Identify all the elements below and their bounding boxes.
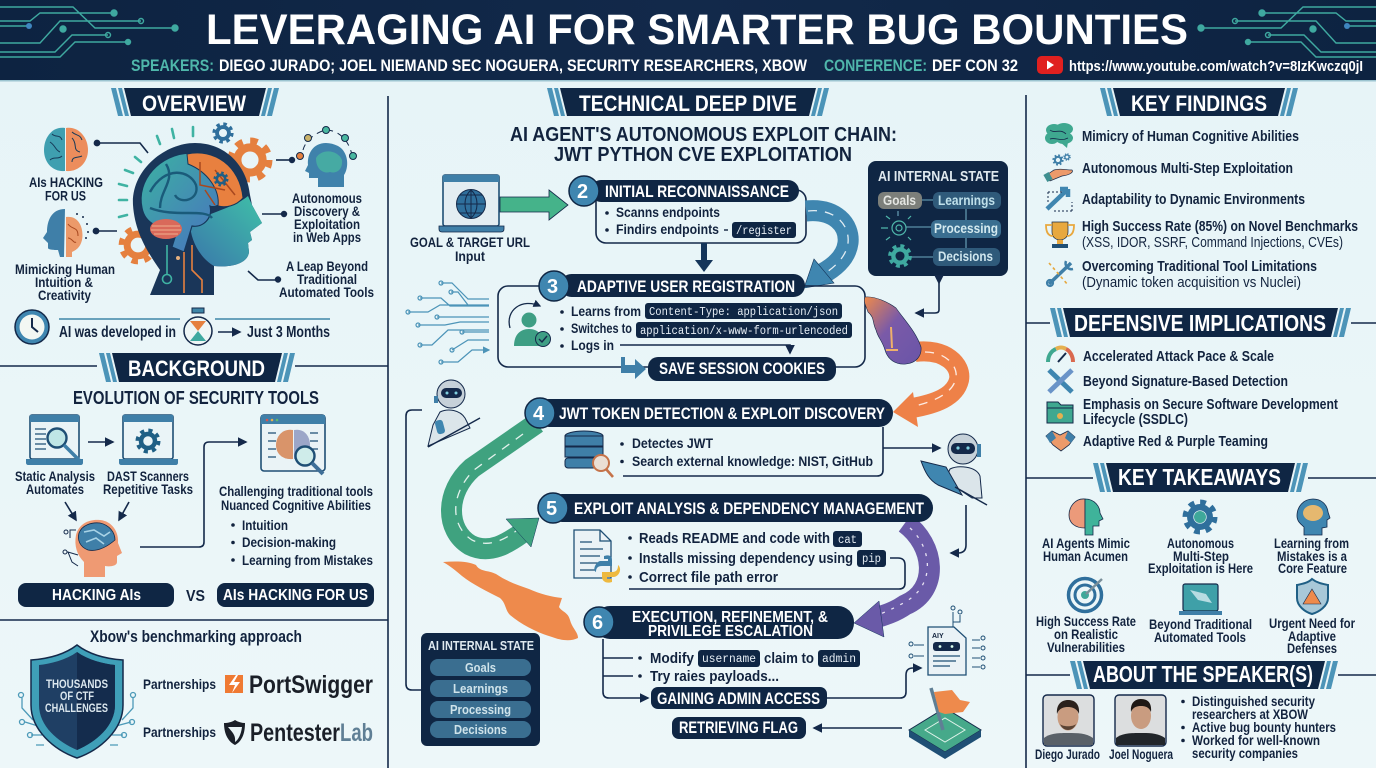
icon: static analysis laptop	[26, 415, 83, 465]
pill: decisions: Decisions	[454, 722, 507, 737]
label: goal and target: GOAL & TARGET URL	[410, 234, 530, 250]
label: DAST scanners: DAST Scanners	[107, 468, 189, 484]
label: autonomous discovery: Exploitation	[294, 216, 360, 232]
list: cognitive abilities: Learning from Mistakes	[242, 552, 373, 568]
pill: processing: Processing	[450, 702, 511, 717]
label: static analysis	[15, 468, 95, 497]
connector: face to label	[262, 212, 286, 216]
step 2: initial reconnaissance	[569, 176, 806, 243]
arrows into head	[65, 502, 129, 520]
step 6: execution and escalation: EXECUTION, REFINEMENT, &	[632, 609, 828, 626]
icon: AI document	[909, 606, 985, 675]
text: just 3 months: Just 3 Months	[247, 324, 330, 341]
finding 5: (Dynamic token acquisition vs Nuclei)	[1082, 274, 1301, 291]
text: partnership two: Partnerships	[143, 724, 216, 740]
heading: key findings: KEY FINDINGS	[1131, 91, 1267, 116]
label: AIs hacking for us	[29, 174, 103, 204]
label: goal and target: Input	[455, 248, 485, 264]
icon: handshake	[1046, 431, 1075, 451]
takeaway: learning from mistakes: Learning from	[1274, 535, 1349, 551]
icon: two-color brain	[44, 128, 88, 171]
pill: gaining admin access	[651, 687, 827, 709]
icon: brain	[1045, 123, 1073, 148]
list: exploit bullets: Correct file path error	[639, 570, 778, 586]
takeaway: multi-step exploitation: Multi-Step	[1173, 548, 1229, 564]
list: recon bullets: Scanns endpoints	[616, 204, 720, 220]
list: recon bullets: /register	[736, 225, 792, 238]
logo: PentesterLab: Lab	[340, 719, 373, 747]
finding 3: Adaptability to Dynamic Environments	[1082, 191, 1305, 208]
pill: gaining admin access: GAINING ADMIN ACCESS	[657, 690, 820, 708]
step 3: adaptive user registration: ADAPTIVE USER REGISTRATION	[577, 278, 795, 296]
heading: key takeaways: KEY TAKEAWAYS	[1118, 464, 1281, 490]
header band	[0, 0, 1376, 82]
heading: overview	[111, 88, 279, 116]
implication 2: Beyond Signature-Based Detection	[1083, 373, 1288, 390]
conference line	[824, 56, 1018, 75]
panel: key takeaways	[1036, 463, 1355, 656]
step 3: adaptive user registration: 3	[547, 276, 558, 298]
icon: browser globe laptop	[439, 175, 504, 232]
heading: defensive implications: DEFENSIVE IMPLICATIONS	[1074, 310, 1326, 336]
pill: save session cookies: SAVE SESSION COOKIES	[659, 360, 825, 378]
arrow: blue curve step 2 to step 3	[804, 211, 848, 288]
takeaway: multi-step exploitation: Autonomous	[1167, 535, 1234, 551]
shield label: OF CTF	[60, 689, 94, 703]
icon: clock	[15, 310, 49, 344]
implication 1: Accelerated Attack Pace & Scale	[1083, 348, 1274, 365]
label: leap beyond: Automated Tools	[279, 284, 374, 300]
step 4: jwt detection: 4	[533, 403, 545, 425]
label: mimicking human intuition: Mimicking Human	[15, 261, 115, 277]
list: modify claim: username	[702, 653, 756, 666]
step 2: initial reconnaissance: INITIAL RECONNAISSANCE	[605, 183, 789, 201]
label: autonomous discovery: Discovery &	[294, 203, 360, 219]
pill: hacking AIs: HACKING AIs	[52, 587, 141, 604]
takeaway: adaptive defenses	[1269, 579, 1355, 656]
list: exploit bullets: Installs missing dependency using	[639, 551, 853, 567]
label: static analysis: Automates	[26, 481, 84, 497]
takeaway: mimic acumen: Human Acumen	[1043, 548, 1128, 564]
icon: human head with brain	[63, 520, 122, 577]
conference line: DEF CON 32	[932, 56, 1018, 75]
list: speaker bio: Worked for well-known	[1192, 732, 1320, 748]
pill: goals: Goals	[465, 660, 496, 675]
label: leap beyond: Traditional	[297, 271, 357, 287]
step 5: exploit analysis: 5	[546, 498, 557, 520]
label: autonomous discovery: in Web Apps	[293, 229, 361, 245]
arrow: flag to retrieving	[814, 727, 902, 729]
takeaway: beyond traditional: Automated Tools	[1154, 629, 1246, 645]
connector: left head	[93, 228, 117, 234]
arrow: logs in to cookies	[620, 345, 790, 353]
pill: goals: Goals	[883, 193, 916, 208]
arrow: green step 4 to step 5	[451, 423, 539, 549]
step 4: jwt detection: JWT TOKEN DETECTION & EXPLOIT DISCOVERY	[559, 405, 885, 423]
pill: processing: Processing	[934, 221, 998, 236]
icon: flag on platform	[909, 688, 981, 759]
arrow: step 2 down to step 3	[695, 243, 713, 272]
step 2: initial reconnaissance: 2	[577, 181, 588, 203]
pill: save session cookies	[648, 357, 836, 381]
list: modify claim	[638, 650, 860, 685]
label: static analysis: Static Analysis	[15, 468, 95, 484]
step 4: jwt detection	[525, 398, 893, 477]
arrow: goal to step 2	[500, 190, 568, 220]
pill: retrieving flag: RETRIEVING FLAG	[679, 719, 798, 737]
implication 4: Adaptive Red & Purple Teaming	[1083, 433, 1268, 450]
panel: background	[15, 353, 374, 607]
icon: youtube	[1037, 56, 1063, 74]
list: exploit bullets: pip	[862, 553, 881, 566]
icon: gear	[890, 246, 910, 266]
arrow: to challenging tools	[140, 442, 246, 547]
takeaway: mimic acumen: AI Agents Mimic	[1042, 535, 1130, 551]
icon: DAST laptop	[119, 415, 178, 465]
label: leap beyond	[279, 258, 374, 300]
connector: left state bracket	[406, 410, 422, 690]
icon: crossed swords	[1049, 370, 1072, 392]
panel: key findings	[1043, 88, 1358, 291]
list: modify claim: admin	[822, 653, 856, 666]
text: challenging tools: Nuanced Cognitive Abilities	[221, 497, 371, 513]
step 5: exploit analysis	[538, 493, 933, 589]
list: modify claim: claim to	[764, 651, 814, 667]
label: autonomous discovery: Autonomous	[292, 190, 362, 206]
label: AIs hacking for us: FOR US	[45, 188, 86, 204]
panel: technical deep dive	[406, 88, 1008, 759]
list: registration bullets: Switches to	[571, 320, 632, 336]
text: challenging tools: Challenging traditional tools	[219, 483, 373, 499]
subtitle: exploit chain: JWT PYTHON CVE EXPLOITATION	[554, 144, 852, 166]
speakers line: DIEGO JURADO; JOEL NIEMAND SEC NOGUERA, SECURITY RESEARCHERS, XBOW	[219, 56, 808, 75]
connector: pip loop	[629, 558, 905, 589]
heading: background: BACKGROUND	[128, 356, 265, 381]
arrow: into save cookies	[621, 357, 646, 379]
title: LEVERAGING AI FOR SMARTER BUG BOUNTIES	[206, 6, 1188, 54]
text: VS: VS	[186, 588, 205, 605]
text: partnership one: Partnerships	[143, 676, 216, 692]
icon: half brain head	[43, 209, 89, 257]
arrow: purple step 5 to step 6	[854, 523, 929, 637]
finding 5: Overcoming Traditional Tool Limitations	[1082, 258, 1317, 275]
takeaway: adaptive defenses: Defenses	[1287, 640, 1337, 656]
icon: hand and gears	[1043, 154, 1073, 182]
finding 4	[1082, 218, 1358, 251]
step 6: execution and escalation	[584, 606, 860, 739]
text: AI was developed in: AI was developed in	[59, 324, 176, 341]
takeaway: learning from mistakes	[1274, 499, 1349, 576]
takeaway: high success rate: Vulnerabilities	[1047, 639, 1125, 655]
label: goal and target	[410, 234, 530, 264]
speakers line: SPEAKERS:	[131, 56, 214, 75]
heading: overview: OVERVIEW	[142, 91, 246, 116]
shield	[31, 645, 123, 758]
connector: brain to head	[94, 140, 148, 153]
heading: benchmarking: Xbow's benchmarking approach	[90, 628, 302, 646]
icon: circuit inputs	[406, 281, 489, 364]
takeaway: mimic acumen	[1042, 499, 1130, 564]
text: challenging tools	[219, 483, 373, 513]
shield label	[45, 677, 108, 715]
icon: robot right	[921, 434, 987, 505]
label: autonomous discovery	[292, 190, 362, 245]
connector: chin to label	[248, 271, 280, 282]
photo: Diego Jurado	[1043, 695, 1094, 746]
takeaway: adaptive defenses: Urgent Need for	[1269, 615, 1355, 631]
list: speaker bio: Distinguished security	[1192, 693, 1315, 709]
takeaway: learning from mistakes: Mistakes is a	[1277, 548, 1347, 564]
finding 5	[1082, 258, 1317, 291]
pill: hacking AIs	[18, 583, 174, 607]
icon: robot left	[428, 380, 480, 447]
label: mimicking human intuition: Creativity	[38, 287, 91, 303]
label: mimicking human intuition	[15, 261, 115, 303]
label: leap beyond: A Leap Beyond	[286, 258, 368, 274]
circuit art right	[1198, 7, 1376, 57]
panel: defensive implications	[1046, 308, 1351, 451]
label: mimicking human intuition: Intuition &	[35, 274, 93, 290]
timeline rule	[59, 318, 330, 320]
connector: gear to head	[276, 158, 294, 162]
list: registration bullets: Logs in	[571, 337, 614, 353]
panel: about the speakers	[1035, 661, 1338, 762]
icon: hourglass	[184, 308, 212, 345]
list: registration bullets: application/x-www-form-urlencoded	[640, 325, 848, 338]
arrow: static to DAST	[88, 441, 113, 443]
list: cognitive abilities: Decision-making	[242, 534, 336, 550]
list: exploit bullets: Reads README and code with	[639, 531, 830, 547]
step 6: execution and escalation: PRIVILEGE ESCALATION	[648, 623, 813, 640]
list: exploit bullets	[628, 531, 886, 586]
icon: crossed tools	[1047, 261, 1073, 286]
finding 1: Mimicry of Human Cognitive Abilities	[1082, 128, 1299, 145]
list: registration bullets: Learns from	[571, 303, 641, 319]
subheading: evolution: EVOLUTION OF SECURITY TOOLS	[73, 388, 319, 408]
shield label: CHALLENGES	[45, 701, 108, 715]
icon: gauge	[1048, 348, 1073, 362]
icon: trophy	[1046, 222, 1074, 248]
list: jwt bullets	[620, 435, 873, 469]
list: cognitive abilities: Intuition	[242, 517, 288, 533]
pill: learnings: Learnings	[938, 193, 995, 208]
subtitle: exploit chain	[510, 124, 897, 166]
takeaway: learning from mistakes: Core Feature	[1278, 560, 1347, 576]
arrow: step 4 to robot	[883, 447, 940, 449]
caption: Joel Noguera: Joel Noguera	[1109, 747, 1173, 762]
pill: AIs hacking for us: AIs HACKING FOR US	[223, 587, 368, 604]
arrow: robot to step 5	[951, 505, 966, 553]
list: jwt bullets: Detectes JWT	[632, 435, 713, 451]
list: speaker bio	[1181, 693, 1336, 761]
list: speaker bio: researchers at XBOW	[1192, 706, 1309, 722]
icon: database magnifier	[565, 431, 613, 477]
panel: overview	[15, 88, 374, 345]
heading: about the speakers: ABOUT THE SPEAKER(S)	[1093, 661, 1313, 687]
list: speaker bio: security companies	[1192, 745, 1298, 761]
subtitle: exploit chain: AI AGENT'S AUTONOMOUS EXPLOIT CHAIN:	[510, 124, 897, 146]
pill: AIs hacking for us	[217, 583, 374, 607]
step 5: exploit analysis: EXPLOIT ANALYSIS & DEPENDENCY MANAGEMENT	[574, 500, 924, 518]
list: exploit bullets: cat	[838, 534, 857, 547]
icon: AI document: AIY	[932, 633, 944, 640]
implication 3	[1083, 396, 1338, 428]
panel: AI internal state lower	[421, 633, 540, 746]
takeaway: high success rate: on Realistic	[1054, 626, 1118, 642]
list: speaker bio: Active bug bounty hunters	[1192, 719, 1336, 735]
list: registration bullets: Content-Type: application/json	[649, 306, 838, 319]
arrow: admin access to AI doc	[827, 668, 921, 698]
icon: document and python	[574, 530, 620, 583]
arrow: state two-way	[916, 283, 939, 313]
panel: AI internal state lower: AI INTERNAL STATE	[428, 638, 534, 653]
arrow: twisted orange step 3 to step 4	[864, 297, 959, 427]
caption: Diego Jurado: Diego Jurado	[1035, 747, 1100, 762]
panel: AI internal state upper	[868, 161, 1008, 276]
conference line: CONFERENCE:	[824, 56, 927, 75]
step 3: adaptive user registration	[498, 271, 865, 381]
arrow: orange flame	[443, 561, 578, 640]
icon: central AI head	[119, 124, 269, 295]
takeaway: high success rate: High Success Rate	[1036, 613, 1136, 629]
pill: decisions: Decisions	[938, 249, 993, 264]
arrow: to 3 months	[218, 331, 240, 333]
icon: browser with brain and magnifier	[261, 415, 325, 474]
heading: technical deep dive: TECHNICAL DEEP DIVE	[579, 91, 797, 116]
label: DAST scanners: Repetitive Tasks	[103, 481, 193, 497]
photo: Joel Noguera	[1115, 695, 1166, 746]
icon: circuit traces around shield	[18, 692, 136, 745]
icon: spiral	[881, 216, 911, 240]
list: recon bullets: Findirs endpoints	[616, 221, 719, 237]
icon: adaptive arrows	[1047, 189, 1072, 211]
takeaway: multi-step exploitation	[1148, 502, 1253, 576]
implication 3: Lifecycle (SSDLC)	[1083, 411, 1188, 428]
takeaway: beyond traditional	[1149, 584, 1252, 645]
takeaway: high success rate	[1036, 578, 1136, 655]
step 6: execution and escalation: 6	[592, 612, 603, 634]
panel: benchmarking	[18, 628, 373, 758]
takeaway: adaptive defenses: Adaptive	[1288, 628, 1336, 644]
shield label: THOUSANDS	[46, 677, 108, 691]
logo: PentesterLab: Pentester	[250, 719, 340, 747]
list: registration bullets	[560, 303, 852, 353]
takeaway: multi-step exploitation: Exploitation is Here	[1148, 560, 1253, 576]
list: recon bullets	[605, 204, 796, 238]
label: DAST scanners	[103, 468, 193, 497]
logo: PortSwigger: PortSwigger	[249, 671, 373, 699]
list: modify claim: Try raies payloads...	[650, 669, 779, 685]
icon: folder	[1047, 402, 1073, 423]
list: jwt bullets: Search external knowledge: NIST, GitHub	[632, 453, 873, 469]
label: AIs hacking for us: AIs HACKING	[29, 174, 103, 190]
pill: retrieving flag	[672, 717, 806, 739]
pill: learnings: Learnings	[453, 681, 508, 696]
panel: AI internal state upper: AI INTERNAL STATE	[878, 168, 999, 185]
circuit art left	[0, 7, 178, 57]
takeaway: beyond traditional: Beyond Traditional	[1149, 616, 1252, 632]
icon: user check	[509, 303, 550, 346]
list: cognitive abilities	[231, 517, 373, 568]
icon: network head	[296, 126, 356, 187]
list: modify claim: Modify	[650, 651, 694, 667]
finding 2: Autonomous Multi-Step Exploitation	[1082, 160, 1293, 177]
